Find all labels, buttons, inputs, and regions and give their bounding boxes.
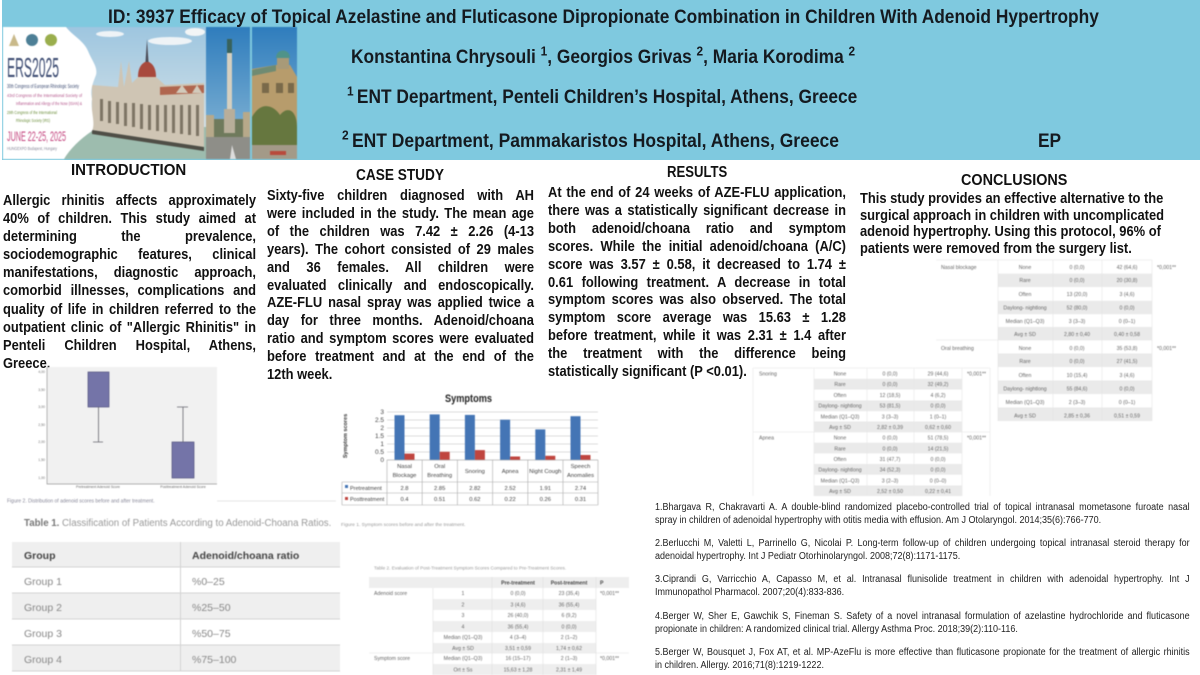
reference 5: 5.Berger W, Bousquet J, Fox AT, et al. MP-AzeFlu is more effective than fluticasone propionate for the treatment of allergic rhinitis <box>655 647 1190 658</box>
table 3: nasal blockage and oral breathing: Median (Q1–Q3) <box>1006 400 1045 406</box>
text: results: scores. While the initial adenoid/choana (A/C) <box>548 239 846 255</box>
text: case study: years). The cohort consisted of 29 males <box>267 242 534 258</box>
table 2: post-treatment symptom scores: 6 (9,2) <box>562 613 577 619</box>
table 4: snoring and apnea: Snoring <box>759 372 777 378</box>
text: results: before treatment, while it was 2.31 ± 1.4 after <box>548 328 846 344</box>
table 4: snoring and apnea: Median (Q1–Q3) <box>821 414 860 420</box>
table 3: nasal blockage and oral breathing: *0,001** <box>1157 265 1176 271</box>
table 3: nasal blockage and oral breathing: 3 (4,6) <box>1120 373 1135 379</box>
conference banner image: Rhinologic Society (IRS) <box>16 118 50 123</box>
text: case study: and 36 females. All children were <box>267 260 534 276</box>
table 4: snoring and apnea: 0,22 ± 0,41 <box>925 489 951 495</box>
heading: conclusions: CONCLUSIONS <box>961 172 1067 189</box>
table 1: adenoid-choana classification: Group <box>24 550 56 562</box>
table 1: adenoid-choana classification: %25–50 <box>192 602 231 614</box>
table 4: snoring and apnea: 0 (0,0) <box>930 457 946 463</box>
reference 5: in children. Allergy. 2016;71(8):1219-1222. <box>655 660 824 671</box>
text: introduction: determining the prevalence, <box>3 229 256 245</box>
table 2: post-treatment symptom scores: 2 <box>462 602 465 608</box>
table 3: nasal blockage and oral breathing: 2 (3–3) <box>1069 400 1085 406</box>
text: results: both adenoid/choana ratio and symptom <box>548 221 846 237</box>
table 3: nasal blockage and oral breathing: 0,51 ± 0,59 <box>1114 414 1140 420</box>
table 2: post-treatment symptom scores: 0 (0,0) <box>562 624 577 630</box>
chart: symptoms bar chart: 2.8 <box>400 486 409 492</box>
chart: symptoms bar chart: Symptom scores <box>343 414 349 458</box>
table 1: adenoid-choana classification <box>12 518 340 672</box>
table 1: adenoid-choana classification: Group 3 <box>24 628 62 640</box>
table 4: snoring and apnea: None <box>834 372 846 378</box>
text: introduction <box>3 193 256 372</box>
reference 2: adenoidal hypertrophy. Int J Pediatr Otorhinolaryngol. 2008;72(8):1171-1175. <box>655 551 960 562</box>
table 2: post-treatment symptom scores: *0,001** <box>600 591 619 597</box>
table 3: nasal blockage and oral breathing: 10 (15,4) <box>1067 373 1088 379</box>
chart: adenoid score box plot: 3,00 <box>38 405 45 409</box>
table 4: snoring and apnea: 3 (2–3) <box>882 478 898 484</box>
chart: symptoms bar chart: 1.5 <box>375 433 384 440</box>
table 4: snoring and apnea: 2,52 ± 0,50 <box>877 489 903 495</box>
text: results: the treatment with the difference being <box>548 346 846 362</box>
table 3: nasal blockage and oral breathing: 52 (80,0) <box>1067 306 1088 312</box>
table 2: post-treatment symptom scores: 2 (1–2) <box>561 635 577 641</box>
reference 2 <box>655 538 1190 562</box>
table 4: snoring and apnea: 0 (0,0) <box>882 382 898 388</box>
reference 1 <box>655 502 1190 526</box>
text: conclusions: This study provides an effective alternative to the <box>860 191 1163 207</box>
table 3: nasal blockage and oral breathing: 0 (0,0) <box>1120 386 1135 392</box>
table 1: adenoid-choana classification: Table 1. Classification of Patients According to Adenoid-Choana Ratios. <box>24 518 331 529</box>
chart: symptoms bar chart: Oral <box>434 464 445 470</box>
conference banner image <box>2 26 298 160</box>
table 2: post-treatment symptom scores: P <box>600 580 604 586</box>
table 3: nasal blockage and oral breathing: 0 (0,0) <box>1070 359 1085 365</box>
text: conclusions: patients were removed from the surgery list. <box>860 241 1132 257</box>
table 4: snoring and apnea: 0 (0,0) <box>930 468 946 474</box>
table 4: snoring and apnea: Avg ± SD <box>829 489 851 495</box>
chart: adenoid score box plot <box>6 366 336 504</box>
text: conclusions: surgical approach in children with uncomplicated <box>860 208 1164 224</box>
table 4: snoring and apnea: *0,001** <box>967 436 986 442</box>
heading: case study: CASE STUDY <box>356 167 444 184</box>
chart: symptoms bar chart: 0.26 <box>540 497 551 503</box>
chart: symptoms bar chart: 2.74 <box>575 486 587 492</box>
table 3: nasal blockage and oral breathing: *0,001** <box>1157 346 1176 352</box>
table 3: nasal blockage and oral breathing: Rare <box>1019 359 1031 365</box>
affiliation 1: 1 ENT Department, Penteli Children’s Hospital, Athens, Greece <box>347 84 857 108</box>
text: results: symptom scores was also observed. The total <box>548 292 846 308</box>
text: conclusions <box>860 191 1164 257</box>
table 3: nasal blockage and oral breathing: Daylong- nightlong <box>1003 306 1047 312</box>
text: results <box>548 185 846 380</box>
text: case study: ratio and symptom scores were evaluated <box>267 331 534 347</box>
table 2: post-treatment symptom scores: 36 (55,4) <box>559 602 580 608</box>
text: case study <box>267 188 534 383</box>
table 4: snoring and apnea: 2,82 ± 0,39 <box>877 425 903 431</box>
table 3: nasal blockage and oral breathing: 20 (30,8) <box>1117 278 1138 284</box>
chart: symptoms bar chart <box>340 393 599 528</box>
chart: symptoms bar chart: Speech <box>571 464 590 470</box>
conference banner image: 43rd Congress of the International Society of <box>7 93 83 98</box>
table 2: post-treatment symptom scores: *0,001** <box>600 656 619 662</box>
chart: symptoms bar chart: 0.62 <box>469 497 481 503</box>
reference 4: propionate in children: A randomized clinical trial. Allergy Asthma Proc. 2018;39(2):110-116. <box>655 624 1018 635</box>
table 3: nasal blockage and oral breathing: 13 (20,0) <box>1067 292 1088 298</box>
table 3: nasal blockage and oral breathing: Often <box>1019 373 1031 379</box>
text: case study: Sixty-five children diagnosed with AH <box>267 188 534 204</box>
text: introduction: quality of life in children referred to the <box>3 302 256 318</box>
reference 3: Immunopathol Pharmacol. 2007;20(4):833-836. <box>655 587 844 598</box>
text: case study: day for three months. Adenoid/choana <box>267 313 534 329</box>
text: conclusions: adenoid hypertrophy. Using this protocol, 96% of <box>860 224 1161 240</box>
text: results: 0.61 following treatment. A decrease in total <box>548 275 846 291</box>
table 1: adenoid-choana classification: Group 2 <box>24 602 62 614</box>
table 3: nasal blockage and oral breathing: 2,80 ± 0,40 <box>1064 332 1090 338</box>
table 2: post-treatment symptom scores: Median (Q1–Q3) <box>444 656 483 662</box>
heading: introduction: INTRODUCTION <box>71 162 186 179</box>
table 2: post-treatment symptom scores: Ort ± Ss <box>454 668 473 674</box>
affiliation 2: 2 ENT Department, Pammakaristos Hospital, Athens, Greece <box>342 128 839 152</box>
chart: symptoms bar chart: 0.31 <box>575 497 586 503</box>
table 2: post-treatment symptom scores: 3 (4,6) <box>510 602 526 608</box>
table 3: nasal blockage and oral breathing: Often <box>1019 292 1031 298</box>
chart: symptoms bar chart: 2.85 <box>434 486 445 492</box>
chart: symptoms bar chart: 3 <box>380 409 384 416</box>
chart: symptoms bar chart: Figure 1. Symptom scores before and after the treatment. <box>341 522 466 528</box>
text: results: score was 3.57 ± 0.58, it decreased to 1.74 ± <box>548 257 846 273</box>
chart: adenoid score box plot: 3,50 <box>38 388 45 392</box>
conference banner image: 30th Congress of European Rhinologic Society <box>7 84 79 90</box>
table 4: snoring and apnea: 0 (0,0) <box>882 446 898 452</box>
table 2: post-treatment symptom scores: 2,31 ± 1,49 <box>556 668 582 674</box>
table 3: nasal blockage and oral breathing: 3 (4,6) <box>1120 292 1135 298</box>
conference banner image: JUNE 22-25, 2025 <box>7 128 66 144</box>
text: introduction: comorbid illnesses, complications and <box>3 283 256 299</box>
table 2: post-treatment symptom scores: Table 2. Evaluation of Post-Treatment Symptom Scores Compared to Pre-Treatment Scores. <box>374 566 566 570</box>
table 3: nasal blockage and oral breathing: 0 (0,0) <box>1070 346 1085 352</box>
reference 4: 4.Berger W, Sher E, Gawchik S, Fineman S. Safety of a novel intranasal formulation of azelastine hydrochloride and fluticasone <box>655 611 1190 622</box>
chart: adenoid score box plot: Pretreatment Adenoid Score <box>76 485 120 489</box>
table 3: nasal blockage and oral breathing: Median (Q1–Q3) <box>1006 319 1045 325</box>
authors: Konstantina Chrysouli 1, Georgios Grivas 2, Maria Korodima 2 <box>351 44 855 68</box>
text: case study: of the children was 7.42 ± 2.26 (4-13 <box>267 224 534 240</box>
table 3: nasal blockage and oral breathing: Avg ± SD <box>1014 414 1036 420</box>
table 3: nasal blockage and oral breathing: None <box>1019 346 1031 352</box>
chart: symptoms bar chart: 1 <box>380 441 384 448</box>
table 2: post-treatment symptom scores: Post-treatment <box>551 580 588 586</box>
table 4: snoring and apnea: 0 (0,0) <box>882 436 898 442</box>
reference 2: 2.Berlucchi M, Valetti L, Parrinello G, Nicolai P. Long-term follow-up of children undergoing topical intranasal steroid therapy for <box>655 538 1190 549</box>
table 2: post-treatment symptom scores: Adenoid score <box>374 591 407 597</box>
table 4: snoring and apnea: Rare <box>834 446 846 452</box>
table 2: post-treatment symptom scores: 16 (15–17) <box>505 656 531 662</box>
conference banner image: HUNGEXPO Budapest, Hungary <box>7 146 58 151</box>
chart: symptoms bar chart: 0.22 <box>504 497 516 503</box>
conference banner image: 29th Congress of the International <box>7 110 57 115</box>
table 3: nasal blockage and oral breathing: Oral breathing <box>941 346 974 352</box>
chart: symptoms bar chart: 0.5 <box>375 449 384 456</box>
chart: symptoms bar chart: Symptoms <box>445 393 492 405</box>
table 4: snoring and apnea: 32 (49,2) <box>928 382 949 388</box>
table 3: nasal blockage and oral breathing: Avg ± SD <box>1014 332 1036 338</box>
table 4: snoring and apnea: 0 (0–0) <box>930 478 946 484</box>
table 4: snoring and apnea: 12 (18,5) <box>880 393 901 399</box>
chart: symptoms bar chart: Nasal <box>397 464 412 470</box>
table 2: post-treatment symptom scores: 3,51 ± 0,59 <box>505 646 531 652</box>
chart: symptoms bar chart: 2 <box>380 425 384 432</box>
text: case study: evaluated clinically and endoscopically. <box>267 278 534 294</box>
chart: adenoid score box plot: 1,00 <box>38 476 45 480</box>
chart: symptoms bar chart: Anomalies <box>567 473 594 479</box>
text: case study: AZE-FLU nasal spray was applied twice a <box>267 295 534 311</box>
table 2: post-treatment symptom scores <box>369 566 629 675</box>
table 4: snoring and apnea: 51 (78,5) <box>928 436 949 442</box>
table 4: snoring and apnea: None <box>834 436 846 442</box>
table 3: nasal blockage and oral breathing: 0,40 ± 0,58 <box>1114 332 1140 338</box>
table 4: snoring and apnea: 31 (47,7) <box>880 457 901 463</box>
table 3: nasal blockage and oral breathing: Nasal blockage <box>941 265 977 271</box>
table 2: post-treatment symptom scores: 2 (1–3) <box>561 656 577 662</box>
table 4: snoring and apnea: *0,001** <box>967 372 986 378</box>
table 2: post-treatment symptom scores: 0 (0,0) <box>510 591 526 597</box>
table 3: nasal blockage and oral breathing: 0 (0,0) <box>1120 306 1135 312</box>
chart: adenoid score box plot: 4,00 <box>38 370 45 374</box>
chart: symptoms bar chart: Posttreatment <box>350 497 385 503</box>
table 3: nasal blockage and oral breathing: 2,85 ± 0,36 <box>1064 414 1090 420</box>
table 4: snoring and apnea: 0 (0,0) <box>930 404 946 410</box>
table 4: snoring and apnea: 14 (21,5) <box>928 446 949 452</box>
heading: results: RESULTS <box>667 164 727 181</box>
text: introduction: Allergic rhinitis affects approximately <box>3 193 256 209</box>
table 4: snoring and apnea: 29 (44,6) <box>928 372 949 378</box>
text: case study: were included in the study. The mean age <box>267 206 534 222</box>
chart: symptoms bar chart: 2.5 <box>375 417 384 424</box>
header band <box>2 0 1200 160</box>
chart: symptoms bar chart: 2.52 <box>504 486 516 492</box>
table 3: nasal blockage and oral breathing: 27 (41,5) <box>1117 359 1138 365</box>
table 3: nasal blockage and oral breathing: 42 (64,6) <box>1117 265 1138 271</box>
table 4: snoring and apnea: Apnea <box>759 436 774 442</box>
reference 3 <box>655 574 1190 598</box>
table 1: adenoid-choana classification: %75–100 <box>192 654 237 666</box>
table 4: snoring and apnea: 3 (3–3) <box>882 414 898 420</box>
table 2: post-treatment symptom scores: 23 (35,4) <box>559 591 580 597</box>
table 3: nasal blockage and oral breathing <box>937 260 1176 421</box>
table 4: snoring and apnea: Daylong- nightlong <box>818 468 862 474</box>
chart: symptoms bar chart: Pretreatment <box>350 486 382 492</box>
table 2: post-treatment symptom scores: 1 <box>462 591 465 597</box>
text: introduction: sociodemographic features, clinical <box>3 247 256 263</box>
session code: EP <box>1038 131 1061 152</box>
reference 1: 1.Bhargava R, Chakravarti A. A double-blind randomized placebo-controlled trial of topical intranasal mometasone furoate nasal <box>655 502 1190 513</box>
chart: adenoid score box plot: 1,50 <box>38 458 45 462</box>
chart: adenoid score box plot: 2,50 <box>38 423 45 427</box>
table 2: post-treatment symptom scores: 4 <box>462 624 465 630</box>
table 3: nasal blockage and oral breathing: 0 (0–1) <box>1119 319 1135 325</box>
table 1: adenoid-choana classification: Group 4 <box>24 654 62 666</box>
table 2: post-treatment symptom scores: 26 (40,0) <box>508 613 529 619</box>
table 3: nasal blockage and oral breathing: Rare <box>1019 278 1031 284</box>
conference banner image: ERS2025 <box>7 52 59 83</box>
chart: symptoms bar chart: Blockage <box>393 473 416 479</box>
table 4: snoring and apnea: Often <box>834 393 846 399</box>
chart: symptoms bar chart: Snoring <box>465 469 485 475</box>
text: case study: before treatment and at the end of the <box>267 349 534 365</box>
table 3: nasal blockage and oral breathing: 0 (0,0) <box>1070 265 1085 271</box>
table 1: adenoid-choana classification: Group 1 <box>24 576 62 588</box>
table 4: snoring and apnea: Rare <box>834 382 846 388</box>
chart: symptoms bar chart: Apnea <box>502 469 519 475</box>
reference 5 <box>655 647 1190 671</box>
chart: symptoms bar chart: 2.82 <box>469 486 481 492</box>
chart: symptoms bar chart: Night Cough <box>529 469 561 475</box>
text: results: there was a statistically significant decrease in <box>548 203 846 219</box>
table 3: nasal blockage and oral breathing: 55 (84,6) <box>1067 386 1088 392</box>
table 4: snoring and apnea: Daylong- nightlong <box>818 404 862 410</box>
chart: adenoid score box plot: Posttreatment Adenoid Score <box>160 485 206 489</box>
table 3: nasal blockage and oral breathing: 35 (53,8) <box>1117 346 1138 352</box>
table 2: post-treatment symptom scores: Median (Q1–Q3) <box>444 635 483 641</box>
text: introduction: outpatient clinic of "Allergic Rhinitis" in <box>3 320 256 336</box>
table 4: snoring and apnea <box>752 368 990 496</box>
chart: adenoid score box plot: 2,00 <box>38 440 45 444</box>
table 2: post-treatment symptom scores: Avg ± SD <box>452 646 474 652</box>
table 2: post-treatment symptom scores: 1,74 ± 0,62 <box>556 646 582 652</box>
table 2: post-treatment symptom scores: 3 <box>462 613 465 619</box>
reference 4 <box>655 611 1190 635</box>
table 4: snoring and apnea: 4 (6,2) <box>930 393 946 399</box>
chart: symptoms bar chart: Breathing <box>427 473 452 479</box>
table 3: nasal blockage and oral breathing: Daylong- nightlong <box>1003 386 1047 392</box>
table 2: post-treatment symptom scores: 15,63 ± 1,28 <box>504 668 533 674</box>
table 4: snoring and apnea: Avg ± SD <box>829 425 851 431</box>
table 2: post-treatment symptom scores: 4 (3–4) <box>510 635 526 641</box>
table 3: nasal blockage and oral breathing: None <box>1019 265 1031 271</box>
text: introduction: Penteli Children Hospital, Athens, <box>3 338 256 354</box>
table 2: post-treatment symptom scores: Pre-treatment <box>501 580 535 586</box>
text: results: At the end of 24 weeks of AZE-FLU application, <box>548 185 846 201</box>
table 4: snoring and apnea: 0 (0,0) <box>882 372 898 378</box>
chart: adenoid score box plot: Figure 2. Distribution of adenoid scores before and after treatment. <box>7 498 155 504</box>
chart: symptoms bar chart: 0.51 <box>434 497 445 503</box>
table 4: snoring and apnea: 0,62 ± 0,60 <box>925 425 951 431</box>
table 3: nasal blockage and oral breathing: 3 (3–3) <box>1069 319 1085 325</box>
reference 1: spray in children of adenoidal hypertrophy with otitis media with effusion. Am J Otolaryngol. 2014;35(6):766-770. <box>655 515 1101 526</box>
text: results: symptom score average was 15.63 ± 1.28 <box>548 310 846 326</box>
table 4: snoring and apnea: Median (Q1–Q3) <box>821 478 860 484</box>
table 4: snoring and apnea: 53 (81,5) <box>880 404 901 410</box>
table 4: snoring and apnea: Often <box>834 457 846 463</box>
text: results: statistically significant (P <0.01). <box>548 364 747 380</box>
chart: symptoms bar chart: 1.91 <box>540 486 551 492</box>
text: case study: 12th week. <box>267 367 332 383</box>
table 1: adenoid-choana classification: %0–25 <box>192 576 225 588</box>
chart: symptoms bar chart: 0 <box>380 457 384 464</box>
table 3: nasal blockage and oral breathing: 0 (0–1) <box>1119 400 1135 406</box>
reference 3: 3.Ciprandi G, Varricchio A, Capasso M, et al. Intranasal flunisolide treatment in children with adenoidal hypertrophy. Int J <box>655 574 1190 585</box>
table 2: post-treatment symptom scores: 36 (55,4) <box>508 624 529 630</box>
conference banner image: Inflammation and Allergy of the Nose (ISIAN) & <box>16 101 82 106</box>
table 4: snoring and apnea: 1 (0–1) <box>930 414 946 420</box>
table 1: adenoid-choana classification: %50–75 <box>192 628 231 640</box>
text: introduction: manifestations, diagnostic approach, <box>3 265 256 281</box>
text: introduction: 40% of children. This study aimed at <box>3 211 256 227</box>
table 4: snoring and apnea: 34 (52,3) <box>880 468 901 474</box>
table 1: adenoid-choana classification: Adenoid/choana ratio <box>192 550 299 562</box>
title: ID: 3937 Efficacy of Topical Azelastine and Fluticasone Dipropionate Combination in Children With Adenoid Hypertrophy <box>108 7 1099 28</box>
table 2: post-treatment symptom scores: Symptom score <box>374 656 410 662</box>
table 3: nasal blockage and oral breathing: 0 (0,0) <box>1070 278 1085 284</box>
chart: symptoms bar chart: 0.4 <box>400 497 409 503</box>
text: introduction: Greece. <box>3 356 50 372</box>
